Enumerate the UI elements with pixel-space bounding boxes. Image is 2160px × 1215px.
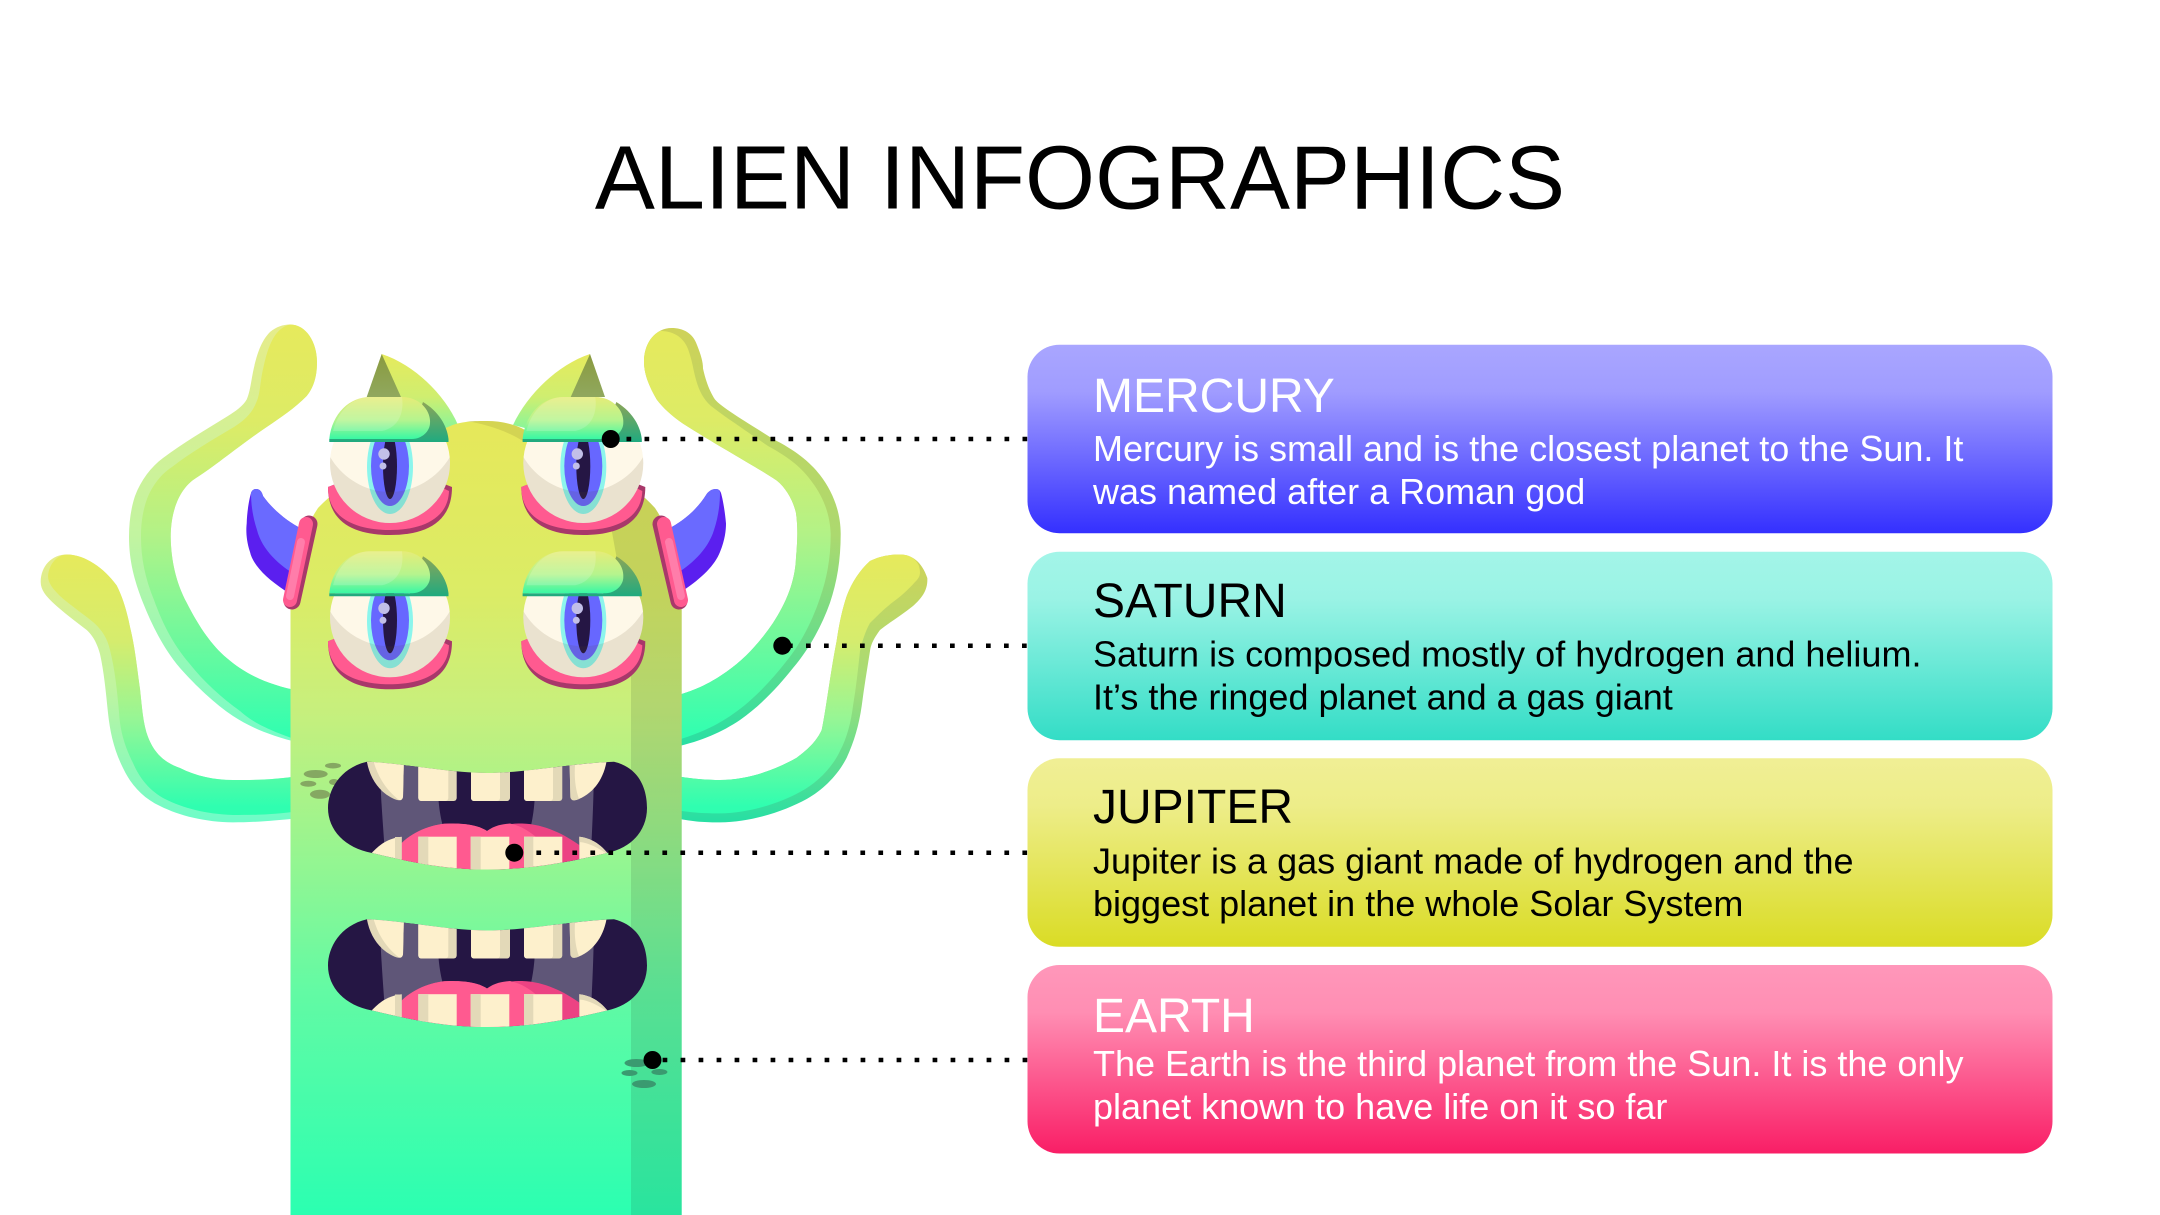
panel: jupiter [1028, 758, 2052, 947]
text: jupiter description: biggest planet in the whole Solar System [1093, 883, 1743, 924]
connector: mercury [602, 430, 1030, 448]
heading: jupiter: JUPITER [1093, 781, 1293, 834]
connector: earth [644, 1051, 1030, 1069]
eye: top right [521, 397, 645, 535]
connector: saturn [773, 637, 1030, 655]
eye: bottom right [521, 551, 645, 689]
eye: top left [328, 397, 452, 535]
warts: lower right [622, 1059, 667, 1088]
panel: saturn [1028, 552, 2052, 740]
text: mercury description: Mercury is small and is the closest planet to the Sun. It [1093, 428, 1963, 469]
arm: lower left tentacle [41, 554, 300, 822]
text: jupiter description: Jupiter is a gas giant made of hydrogen and the [1093, 840, 1854, 882]
text: mercury description: was named after a Roman god [1092, 471, 1585, 512]
arm: upper right tentacle [644, 328, 841, 747]
arm: lower right tentacle [675, 554, 927, 822]
text: saturn description: It’s the ringed planet and a gas giant [1093, 676, 1673, 718]
heading: saturn: SATURN [1093, 575, 1287, 628]
text: earth description: planet known to have life on it so far [1093, 1086, 1667, 1127]
text: earth description: The Earth is the third planet from the Sun. It is the only [1093, 1043, 1963, 1084]
eye: bottom left [328, 551, 452, 689]
title: ALIEN INFOGRAPHICS [595, 129, 1565, 229]
panel: mercury [1028, 345, 2052, 533]
heading: earth: EARTH [1093, 990, 1255, 1043]
ear: left blue [246, 489, 302, 600]
alien illustration [41, 324, 927, 1215]
mouth: lower [320, 912, 655, 1038]
horn: right [513, 354, 605, 440]
horn: left [367, 354, 458, 440]
mouth: upper [320, 755, 655, 880]
arm: upper left tentacle [129, 324, 317, 743]
panel: earth [1028, 965, 2052, 1154]
strap: left pink [290, 524, 309, 601]
strap: right pink [661, 524, 681, 601]
text: saturn description: Saturn is composed mostly of hydrogen and helium. [1093, 634, 1921, 674]
warts: upper left [300, 763, 341, 799]
ear: right blue [668, 489, 726, 600]
connector: jupiter [505, 844, 1030, 862]
heading: mercury: MERCURY [1093, 370, 1335, 423]
body [290, 421, 682, 1215]
